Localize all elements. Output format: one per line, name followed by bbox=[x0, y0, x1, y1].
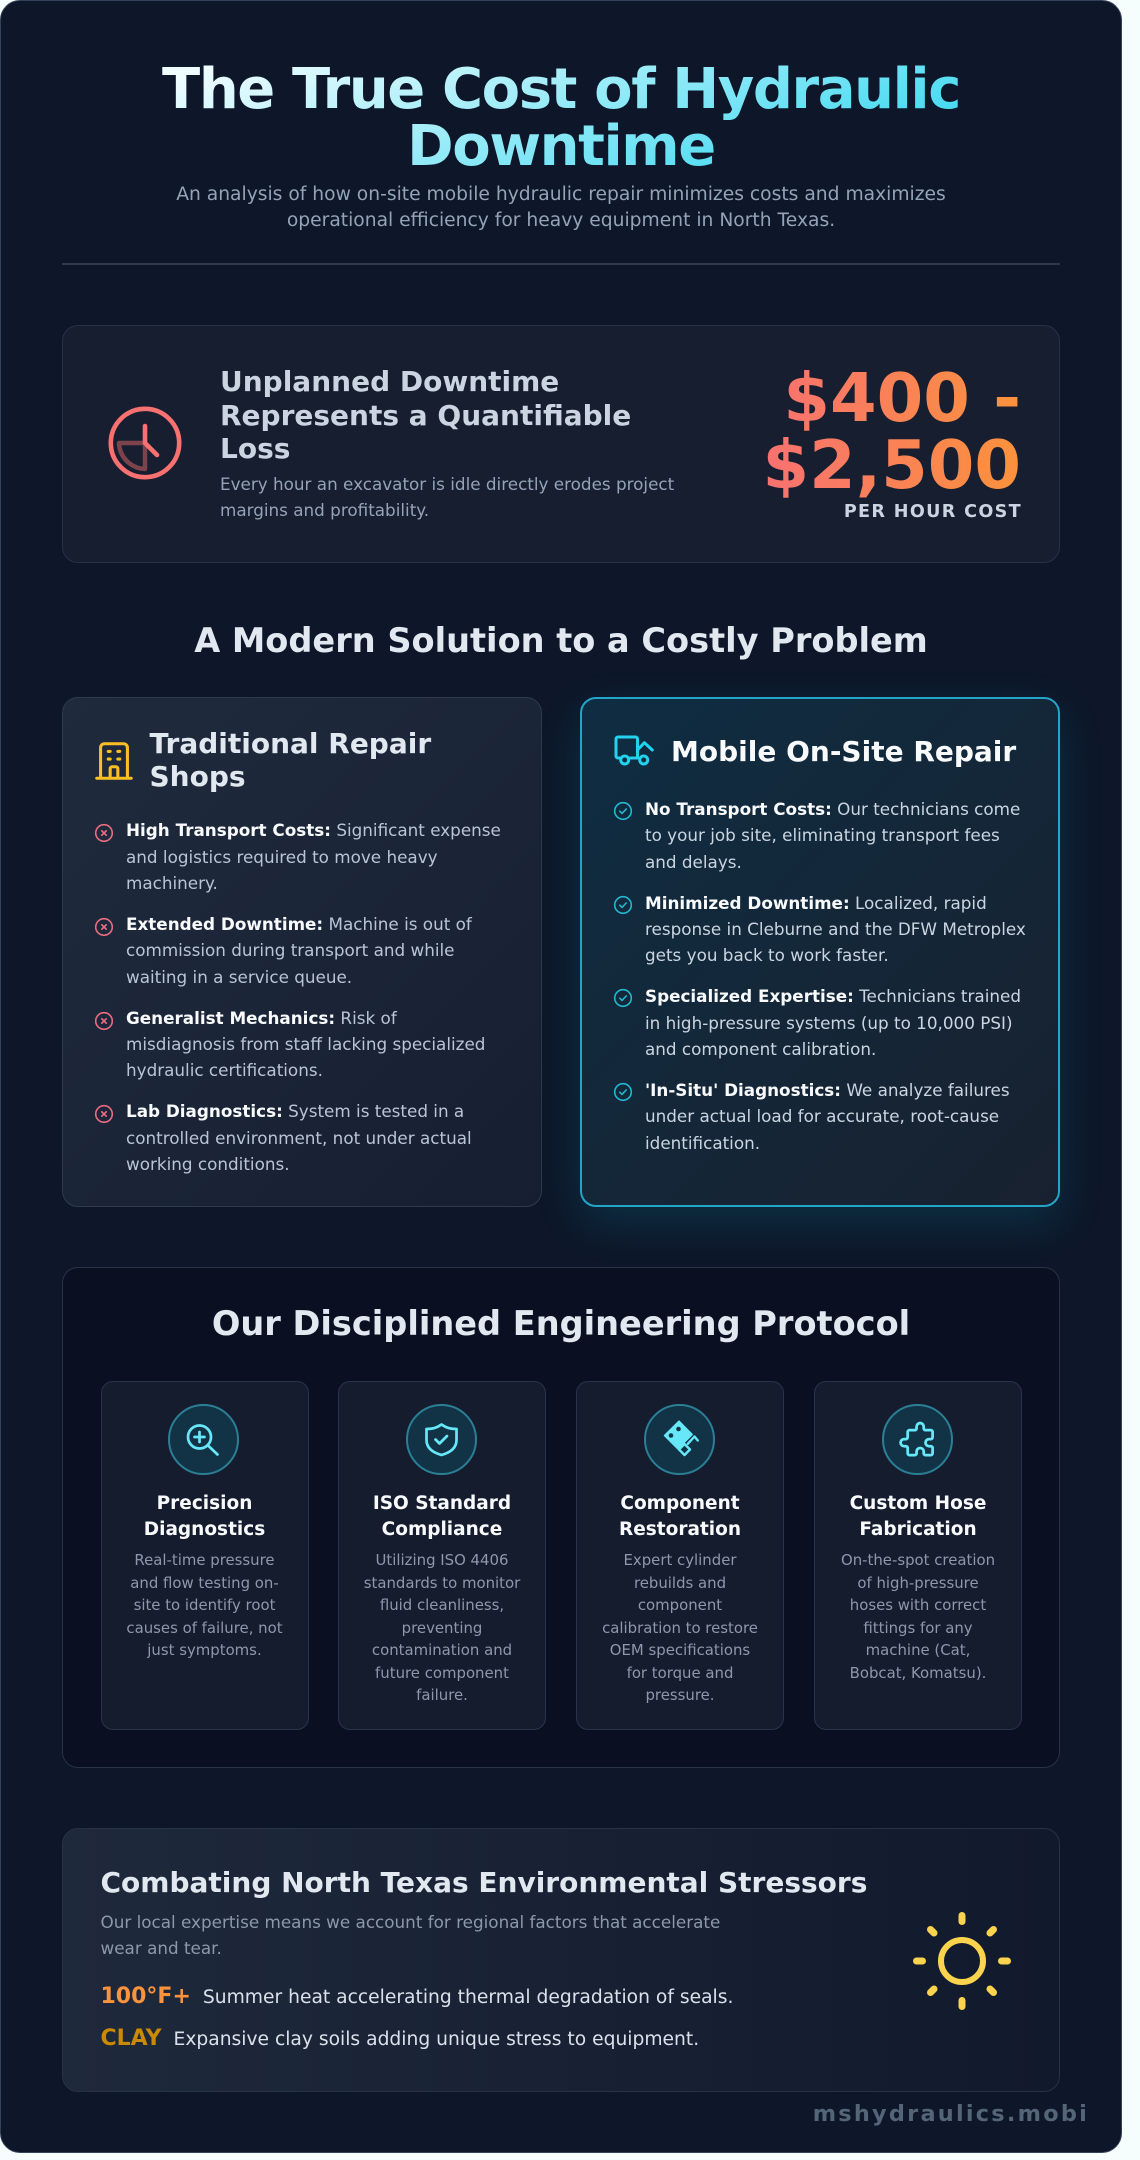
text: machinery. bbox=[126, 873, 218, 893]
heading: Traditional Repair bbox=[150, 726, 431, 760]
text bbox=[645, 893, 1026, 965]
card: custom hose fabrication bbox=[814, 1381, 1022, 1730]
icon: truck bbox=[614, 736, 654, 766]
text: and delays. bbox=[645, 852, 742, 872]
card text: pressure. bbox=[645, 1686, 715, 1704]
card title: Restoration bbox=[619, 1519, 741, 1540]
card text: future component bbox=[375, 1664, 509, 1682]
card text: rebuilds and bbox=[634, 1574, 726, 1592]
text: and logistics required to move heavy bbox=[126, 847, 438, 867]
card text: and flow testing on- bbox=[130, 1574, 279, 1592]
subtitle: An analysis of how on-site mobile hydraulic repair minimizes costs and maximizes bbox=[176, 184, 946, 205]
title: The True Cost of Hydraulic bbox=[162, 57, 960, 122]
stat: hourly cost: $400 - bbox=[783, 359, 1021, 437]
text: gets you back to work faster. bbox=[645, 945, 889, 965]
text: response in Cleburne and the DFW Metroplex bbox=[645, 919, 1026, 939]
card title bbox=[815, 1491, 1021, 1543]
card: iso standard compliance bbox=[338, 1381, 546, 1730]
text: under actual load for accurate, root-cause bbox=[645, 1106, 999, 1126]
panel: traditional repair shops bbox=[62, 697, 542, 1207]
card title: Diagnostics bbox=[144, 1519, 265, 1540]
card text: contamination and bbox=[372, 1641, 512, 1659]
text: No Transport Costs: Our technicians come bbox=[645, 799, 1020, 819]
description bbox=[220, 474, 674, 520]
card text: standards to monitor bbox=[364, 1574, 520, 1592]
text: Specialized Expertise: Technicians trained bbox=[645, 986, 1021, 1006]
stat: hourly cost bbox=[762, 365, 1021, 499]
item: lab diagnostics bbox=[94, 1101, 472, 1174]
card text: machine (Cat, bbox=[866, 1641, 970, 1659]
text bbox=[126, 1008, 485, 1080]
card text: OEM specifications bbox=[610, 1641, 750, 1659]
card title: Fabrication bbox=[859, 1519, 977, 1540]
icon: component bbox=[644, 1404, 715, 1475]
card text: causes of failure, not bbox=[126, 1618, 283, 1636]
icon: check circle bbox=[614, 896, 632, 914]
text: 'In-Situ' Diagnostics: We analyze failures bbox=[645, 1080, 1010, 1100]
text: working conditions. bbox=[126, 1154, 290, 1174]
panel: mobile on-site repair bbox=[580, 697, 1060, 1207]
panel: downtime cost bbox=[62, 325, 1060, 563]
text bbox=[126, 914, 472, 987]
text: commission during transport and while bbox=[126, 940, 454, 960]
card text bbox=[602, 1551, 758, 1704]
title bbox=[151, 61, 971, 175]
card title bbox=[144, 1493, 265, 1540]
icon: shield bbox=[406, 1404, 477, 1475]
card text: Utilizing ISO 4406 bbox=[376, 1551, 508, 1569]
heading: unplanned downtime: Represents a Quantifiable bbox=[220, 399, 631, 432]
item: specialized expertise bbox=[614, 986, 1021, 1059]
text: in high-pressure systems (up to 10,000 PSI) bbox=[645, 1013, 1013, 1033]
heading: protocol: Our Disciplined Engineering Protocol bbox=[212, 1304, 910, 1343]
item: extended downtime bbox=[94, 914, 472, 987]
heading: Combating North Texas Environmental Stressors bbox=[100, 1866, 867, 1899]
card text: fluid cleanliness, bbox=[380, 1596, 504, 1614]
text: Extended Downtime: Machine is out of bbox=[126, 914, 472, 934]
icon: building bbox=[95, 742, 133, 780]
subtitle bbox=[176, 184, 946, 231]
stat: clay: CLAY Expansive clay soils adding unique stress to equipment. bbox=[100, 2026, 699, 2051]
item: transport costs bbox=[94, 820, 501, 893]
icon: check circle bbox=[614, 802, 632, 820]
stat label: PER HOUR COST bbox=[844, 502, 1022, 522]
card text bbox=[126, 1551, 283, 1659]
heading: unplanned downtime: Unplanned Downtime bbox=[220, 365, 559, 398]
text: High Transport Costs: Significant expense bbox=[126, 820, 501, 840]
card title: Precision bbox=[157, 1493, 252, 1514]
description: Our local expertise means we account for regional factors that accelerate bbox=[100, 1912, 720, 1932]
text: Minimized Downtime: Localized, rapid bbox=[645, 893, 987, 913]
text: waiting in a service queue. bbox=[126, 967, 352, 987]
item: minimized downtime bbox=[614, 893, 1026, 965]
description: margins and profitability. bbox=[220, 500, 429, 520]
text bbox=[645, 986, 1021, 1059]
text bbox=[126, 820, 501, 893]
icon: puzzle bbox=[882, 1404, 953, 1475]
icon: x circle bbox=[94, 918, 114, 936]
text: identification. bbox=[645, 1133, 760, 1153]
card text: just symptoms. bbox=[147, 1641, 262, 1659]
heading: Mobile On-Site Repair bbox=[671, 734, 1016, 768]
card text: component bbox=[638, 1596, 722, 1614]
icon: clock bbox=[108, 406, 182, 480]
text: to your job site, eliminating transport fees bbox=[645, 825, 1000, 845]
text: misdiagnosis from staff lacking specialized bbox=[126, 1034, 485, 1054]
description: Every hour an excavator is idle directly erodes project bbox=[220, 474, 674, 494]
subtitle: operational efficiency for heavy equipment in North Texas. bbox=[287, 210, 835, 231]
card text bbox=[364, 1551, 520, 1704]
heading bbox=[150, 726, 432, 793]
card text: On-the-spot creation bbox=[841, 1551, 995, 1569]
icon: x circle bbox=[94, 1012, 114, 1030]
heading: unplanned downtime bbox=[220, 365, 631, 465]
text: Generalist Mechanics: Risk of bbox=[126, 1008, 397, 1028]
card text: calibration to restore bbox=[602, 1618, 758, 1636]
card: component restoration bbox=[576, 1381, 784, 1730]
icon: x circle bbox=[94, 824, 114, 842]
stat: hourly cost: $2,500 bbox=[762, 426, 1021, 504]
card text: preventing bbox=[402, 1618, 482, 1636]
card: precision diagnostics bbox=[100, 1381, 308, 1730]
stat: heat: 100°F+ Summer heat accelerating thermal degradation of seals. bbox=[100, 1984, 733, 2009]
panel: environmental stressors bbox=[62, 1828, 1060, 2092]
icon: magnifier bbox=[168, 1404, 239, 1475]
section heading: solution: A Modern Solution to a Costly Problem bbox=[194, 621, 928, 660]
item: no transport costs bbox=[614, 799, 1020, 872]
text: controlled environment, not under actual bbox=[126, 1128, 472, 1148]
item: generalist mechanics bbox=[94, 1008, 485, 1080]
text: hydraulic certifications. bbox=[126, 1060, 323, 1080]
icon: check circle bbox=[614, 988, 632, 1008]
card title: Compliance bbox=[382, 1519, 502, 1540]
heading: unplanned downtime: Loss bbox=[220, 432, 290, 465]
card title: ISO Standard bbox=[373, 1493, 511, 1514]
heading: Shops bbox=[150, 760, 246, 793]
card title: Component bbox=[620, 1493, 740, 1514]
icon: sun bbox=[912, 1911, 1012, 2011]
text: and component calibration. bbox=[645, 1039, 876, 1059]
item: in-situ diagnostics bbox=[614, 1080, 1010, 1153]
description: wear and tear. bbox=[100, 1938, 222, 1958]
card text: of high-pressure bbox=[857, 1574, 979, 1592]
text bbox=[645, 799, 1020, 872]
card text: hoses with correct bbox=[850, 1596, 986, 1614]
card text: fittings for any bbox=[863, 1618, 973, 1636]
icon: check circle bbox=[614, 1082, 632, 1102]
card text: site to identify root bbox=[134, 1596, 275, 1614]
card title: Custom Hose bbox=[850, 1493, 986, 1514]
text bbox=[645, 1080, 1010, 1153]
card text: for torque and bbox=[627, 1664, 733, 1682]
description bbox=[100, 1909, 720, 1961]
card text bbox=[815, 1549, 1021, 1684]
footer brand: mshydraulics.mobi bbox=[813, 2101, 1089, 2127]
card text: Expert cylinder bbox=[624, 1551, 736, 1569]
icon: x circle bbox=[94, 1104, 114, 1124]
text bbox=[126, 1101, 472, 1174]
panel: engineering protocol bbox=[62, 1267, 1060, 1768]
card text: Real-time pressure bbox=[134, 1551, 275, 1569]
title: Downtime bbox=[407, 114, 715, 179]
text: Lab Diagnostics: System is tested in a bbox=[126, 1101, 464, 1121]
card title bbox=[373, 1493, 511, 1540]
card title bbox=[619, 1493, 741, 1540]
card text: Bobcat, Komatsu). bbox=[850, 1664, 986, 1682]
card text: failure. bbox=[416, 1686, 468, 1704]
